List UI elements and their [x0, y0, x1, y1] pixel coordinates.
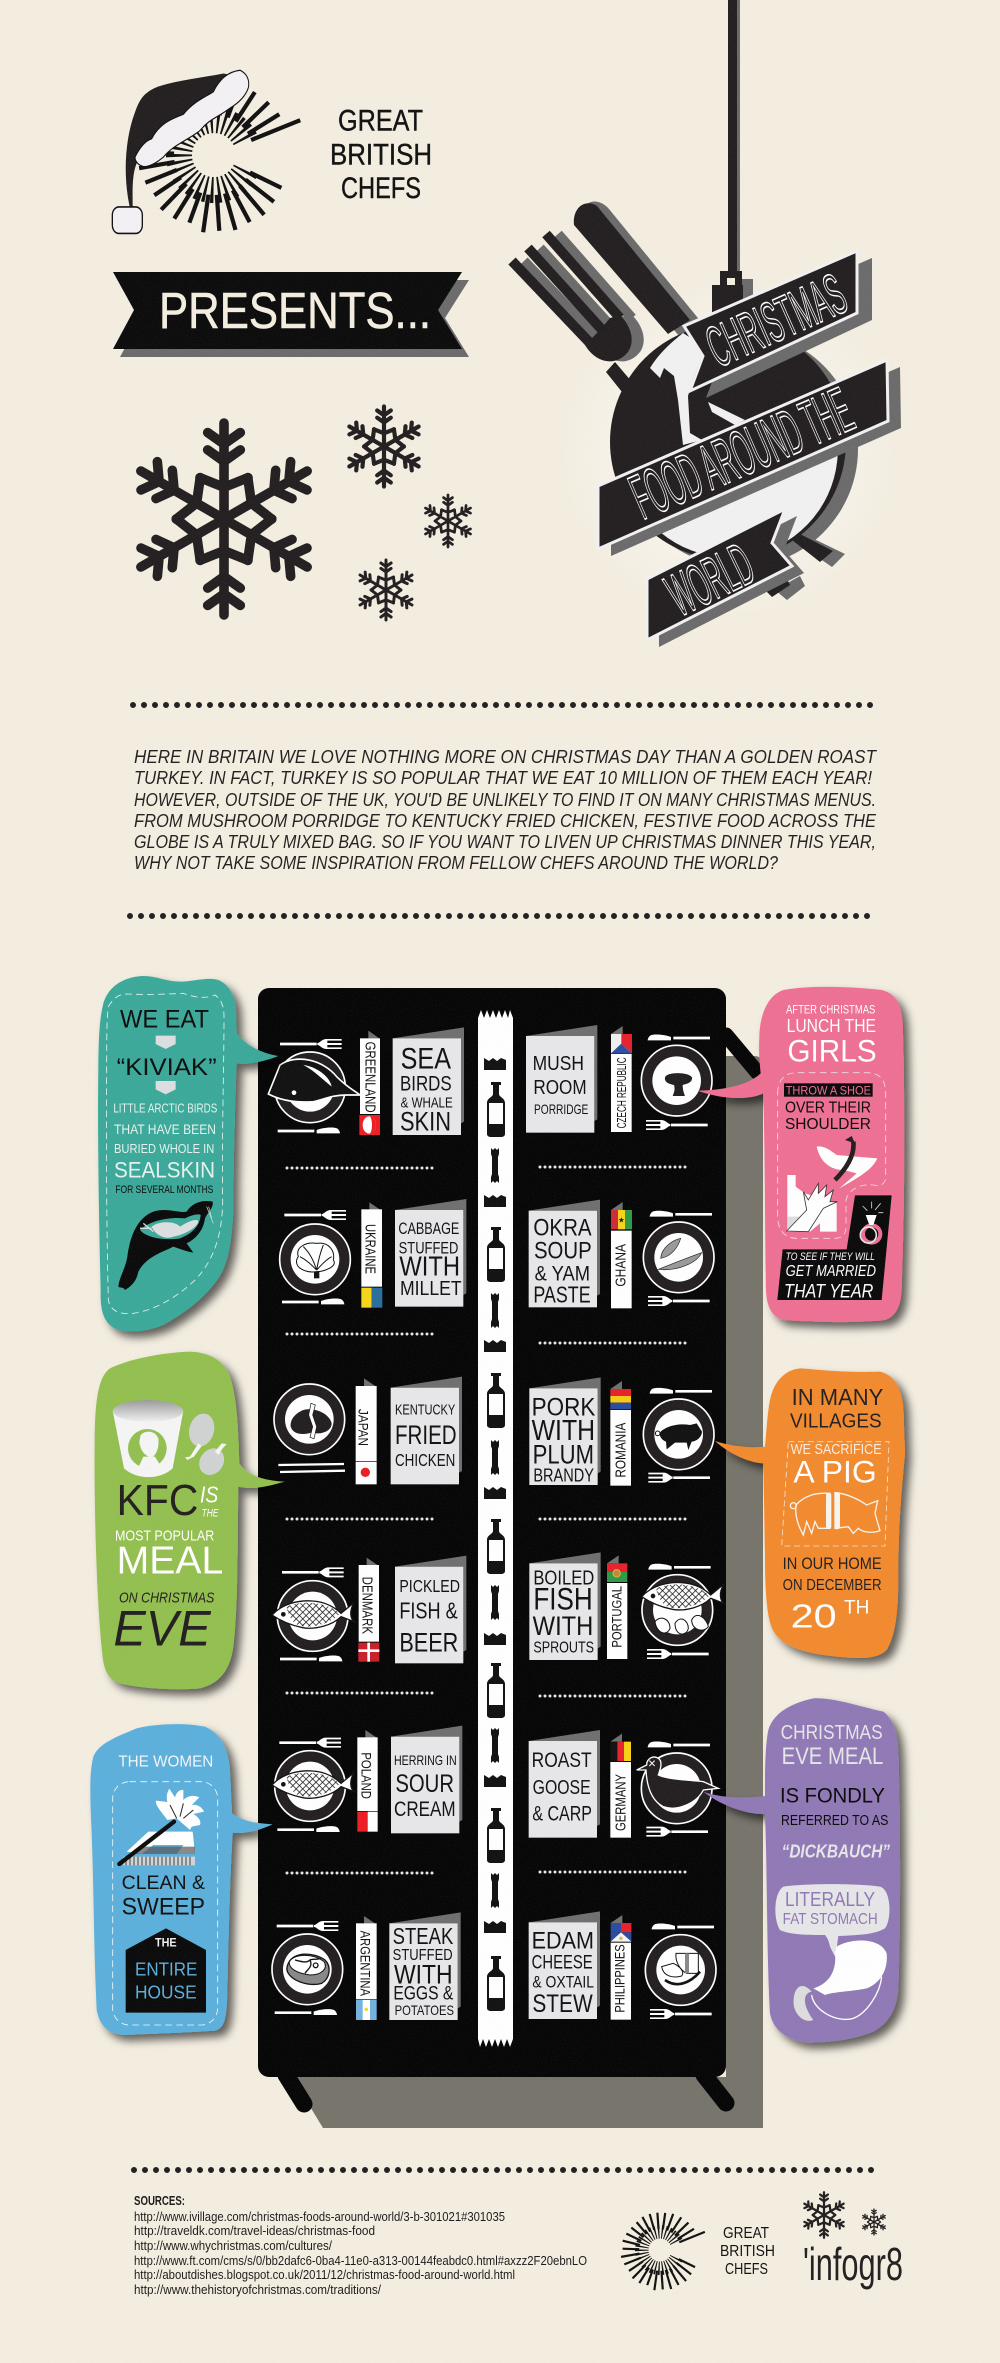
callout: kiviak (teal): BURIED WHOLE IN [114, 1141, 214, 1156]
callout: kiviak (teal): “KIVIAK” [117, 1054, 217, 1081]
icon: brush and duster [119, 1789, 204, 1865]
sources: SOURCES: [134, 2194, 185, 2208]
row: Poland: HERRING IN [394, 1753, 457, 1768]
sources: http://aboutdishes.blogspot.co.uk/2011/12/christmas-food-around-world.html [134, 2268, 515, 2282]
row: Greenland [268, 1027, 464, 1137]
table [258, 988, 757, 2104]
snowflakes [129, 406, 474, 620]
callout: the women (blue): SWEEP [122, 1893, 205, 1920]
callout: kfc (green): IS [200, 1481, 219, 1507]
row: Ghana: OKRA [533, 1214, 592, 1241]
intro text: TURKEY. IN FACT, TURKEY IS SO POPULAR THAT WE EAT 10 MILLION OF THEM EACH YEAR! [134, 768, 872, 788]
row: Greenland: SEA [401, 1042, 451, 1075]
row: Ghana: & YAM [535, 1261, 590, 1286]
callout: the women (blue) [90, 1724, 273, 2035]
callout: throw a shoe (pink): LUNCH THE [787, 1015, 876, 1036]
icon: seal [118, 1201, 213, 1290]
intro text: FROM MUSHROOM PORRIDGE TO KENTUCKY FRIED CHICKEN, FESTIVE FOOD ACROSS THE [134, 811, 877, 831]
icon: house [126, 1928, 206, 2013]
sources: http://www.ivillage.com/christmas-foods-around-world/3-b-301021#301035 [134, 2210, 505, 2224]
callout: dickbauch (purple): “DICKBAUCH” [782, 1841, 891, 1862]
callout: throw a shoe (pink): OVER THEIR [785, 1099, 871, 1116]
row: Germany: GOOSE [533, 1777, 591, 1799]
icon: split pig [790, 1493, 880, 1535]
row: Philippines [529, 1911, 716, 2020]
row: Argentina: WITH [394, 1959, 453, 1989]
sources: http://www.whychristmas.com/cultures/ [134, 2239, 332, 2253]
row: Denmark: DENMARK [359, 1577, 375, 1634]
row: Ukraine: STUFFED [399, 1238, 458, 1257]
intro text [134, 747, 878, 873]
row: Ukraine [280, 1199, 466, 1308]
callout: sacrifice a pig (orange): A PIG [793, 1453, 877, 1489]
row: Japan: KENTUCKY [395, 1403, 455, 1419]
intro text: GLOBE IS A TRULY MIXED BAG. SO IF YOU WANT TO LIVEN UP CHRISTMAS DINNER THIS YEAR, [134, 832, 876, 852]
row: Ghana [529, 1200, 714, 1308]
logo text: Great British Chefs: GREAT [338, 105, 423, 138]
panel: marriage ring: TO SEE IF THEY WILL [786, 1251, 875, 1263]
row: Ghana: ★ [618, 1215, 625, 1224]
callout: kfc (green): KFC [117, 1476, 198, 1525]
row: Argentina: STEAK [393, 1923, 453, 1949]
callout: sacrifice a pig (orange): IN MANY [792, 1384, 884, 1410]
callout: kfc (green): ON CHRISTMAS [119, 1591, 215, 1607]
table shadow [292, 1056, 763, 2128]
title ornament: christmas food around the world [512, 0, 901, 647]
row: Romania: PLUM [533, 1439, 594, 1469]
banner: presents [113, 272, 469, 357]
row: Romania [529, 1377, 714, 1486]
callout: kiviak (teal) [98, 976, 278, 1331]
callout: throw a shoe (pink): THROW A SHOE [786, 1083, 871, 1097]
row: Czech Republic [526, 1025, 712, 1133]
row: Germany: GERMANY [614, 1774, 630, 1831]
row: Germany [529, 1730, 718, 1838]
callout: kiviak (teal): FOR SEVERAL MONTHS [115, 1184, 213, 1196]
sources: http://traveldk.com/travel-ideas/christmas-food [134, 2224, 375, 2238]
callout: sacrifice a pig (orange): IN OUR HOME [783, 1555, 882, 1573]
ribbon: world: WORLD [656, 530, 764, 629]
row: Ukraine: CABBAGE [398, 1219, 459, 1238]
panel: marriage ring: GET MARRIED [786, 1263, 876, 1280]
row: Argentina: EGGS & [393, 1983, 453, 2004]
row: Argentina: STUFFED [393, 1947, 453, 1964]
icon: speech blob and stomach: FAT STOMACH [783, 1911, 878, 1928]
row: Poland: SOUR [395, 1770, 454, 1798]
row: Greenland: SKIN [400, 1107, 451, 1137]
row: Czech Republic: CZECH REPUBLIC [615, 1057, 629, 1128]
icon: house: THE [155, 1936, 177, 1950]
footer logo: Great British Chefs: CHEFS [725, 2261, 768, 2278]
row: Portugal: SPROUTS [533, 1640, 594, 1657]
table runner with bottles, crowns and crackers [478, 1010, 513, 2047]
row: Germany: ROAST [532, 1748, 592, 1772]
callout: kiviak (teal): SEALSKIN [114, 1158, 215, 1183]
footer logo: infogr8: 'infogr8 [803, 2238, 903, 2290]
ribbon: christmas [684, 251, 872, 398]
callout: sacrifice a pig (orange): WE SACRIFICE [791, 1442, 882, 1458]
row: Argentina [272, 1912, 461, 2020]
row: Greenland: GREENLAND [361, 1042, 377, 1113]
row: Czech Republic: PORRIDGE [534, 1102, 588, 1117]
row: Philippines: STEW [532, 1990, 593, 2018]
row: Japan: CHICKEN [395, 1450, 455, 1470]
callout: dickbauch (purple) [703, 1698, 900, 2043]
sources: http://www.thehistoryofchristmas.com/traditions/ [134, 2283, 381, 2297]
row: Romania: PORK [532, 1394, 595, 1422]
intro text: WHY NOT TAKE SOME INSPIRATION FROM FELLOW CHEFS AROUND THE WORLD? [134, 853, 778, 873]
row: Philippines: EDAM [532, 1927, 594, 1954]
callout: the women (blue): THE WOMEN [118, 1754, 213, 1771]
icon: speech blob and stomach: LITERALLY [785, 1889, 875, 1911]
logo text: Great British Chefs [330, 105, 432, 205]
footer logo: Great British Chefs [621, 2213, 775, 2290]
row: Portugal: BOILED [533, 1567, 594, 1589]
callout: sacrifice a pig (orange): 20 [791, 1597, 837, 1634]
row: Denmark: PICKLED [399, 1576, 460, 1596]
logo text: Great British Chefs: CHEFS [341, 172, 421, 205]
row: Poland: CREAM [394, 1797, 456, 1821]
intro text: HERE IN BRITAIN WE LOVE NOTHING MORE ON CHRISTMAS DAY THAN A GOLDEN ROAST [134, 747, 878, 767]
intro text: HOWEVER, OUTSIDE OF THE UK, YOU'D BE UNLIKELY TO FIND IT ON MANY CHRISTMAS MENUS. [134, 790, 876, 810]
row: Romania: WITH [532, 1415, 595, 1447]
icon: shoe and hand [787, 1136, 877, 1232]
row: Ukraine: WITH [399, 1251, 460, 1282]
callout: kiviak (teal): WE EAT [120, 1005, 209, 1033]
callout: throw a shoe (pink): SHOULDER [785, 1116, 871, 1133]
panel: marriage ring: THAT YEAR [784, 1281, 873, 1302]
callout: throw a shoe (pink): AFTER CHRISTMAS [786, 1003, 876, 1016]
row: Poland [272, 1726, 462, 1833]
row: Ghana: SOUP [534, 1237, 592, 1264]
callout: dickbauch (purple): IS FONDLY [780, 1784, 885, 1808]
row: Argentina: ARGENTINA [358, 1931, 374, 1997]
row: Czech Republic: ROOM [533, 1077, 587, 1099]
callout: kfc (green): THE [202, 1508, 219, 1520]
callout: kiviak (teal): THAT HAVE BEEN [114, 1121, 216, 1137]
callout: dickbauch (purple): EVE MEAL [782, 1743, 883, 1770]
row: Portugal: WITH [533, 1611, 593, 1641]
row: Greenland: & WHALE [401, 1094, 453, 1111]
sources: http://www.ft.com/cms/s/0/bb2dafc6-0ba4-11e0-a313-00144feabdc0.html#axzz2F20ebnLO [134, 2254, 587, 2268]
row: Japan: FRIED [395, 1420, 457, 1450]
row: Ukraine: UKRAINE [361, 1224, 377, 1274]
row: Denmark: FISH & [399, 1598, 458, 1624]
row: Philippines: PHILIPPINES [611, 1944, 627, 2013]
footer logo: Great British Chefs: BRITISH [720, 2243, 775, 2260]
callout: kfc (green): MEAL [117, 1539, 223, 1582]
callout: throw a shoe (pink) [697, 987, 904, 1322]
sources [134, 2194, 587, 2297]
icon: house: ENTIRE [135, 1959, 197, 1980]
row: Japan: JAPAN [355, 1409, 371, 1446]
footer logo: Great British Chefs: GREAT [723, 2225, 769, 2242]
row: Denmark [272, 1556, 466, 1663]
row: Denmark: BEER [399, 1628, 458, 1658]
row: Ghana: GHANA [614, 1244, 630, 1287]
row: Portugal: PORTUGAL [609, 1586, 625, 1648]
callout: kfc (green): MOST POPULAR [115, 1529, 214, 1545]
footer logo: infogr8 [802, 2192, 903, 2290]
row: Portugal [529, 1552, 726, 1660]
row: Philippines: & OXTAIL [532, 1973, 594, 1992]
logo: santa hat burst [112, 70, 300, 233]
row: Czech Republic: MUSH [533, 1053, 584, 1075]
row: Greenland: BIRDS [400, 1072, 452, 1096]
panel: marriage ring [777, 1195, 892, 1302]
row: Poland: POLAND [359, 1752, 375, 1799]
row: Ghana: PASTE [533, 1282, 591, 1308]
banner: presents: PRESENTS... [159, 282, 431, 339]
row: Ukraine: MILLET [400, 1277, 462, 1300]
logo text: Great British Chefs: BRITISH [330, 138, 432, 172]
callout: kiviak (teal): LITTLE ARCTIC BIRDS [113, 1102, 217, 1116]
callout: sacrifice a pig (orange): VILLAGES [790, 1411, 882, 1433]
callout: the women (blue): CLEAN & [122, 1873, 205, 1894]
row: Romania: BRANDY [533, 1464, 594, 1485]
callout: dickbauch (purple): CHRISTMAS [781, 1722, 883, 1744]
row: Romania: ROMANIA [614, 1422, 630, 1478]
callout: sacrifice a pig (orange) [715, 1368, 905, 1658]
row: Germany: & CARP [532, 1802, 592, 1826]
icon: kfc bucket [113, 1400, 229, 1480]
ribbon: world [647, 509, 804, 647]
callout: dickbauch (purple): REFERRED TO AS [781, 1813, 889, 1829]
callout: kfc (green): EVE [113, 1601, 211, 1657]
row: Philippines: CHEESE [532, 1953, 593, 1974]
callout: kfc (green) [95, 1352, 285, 1689]
icon: speech blob and stomach [775, 1884, 890, 2021]
callout: sacrifice a pig (orange): TH [844, 1597, 869, 1618]
icon: house: HOUSE [135, 1982, 197, 2003]
callout: sacrifice a pig (orange): ON DECEMBER [783, 1577, 882, 1594]
callout: throw a shoe (pink): GIRLS [787, 1033, 877, 1069]
row: Portugal: FISH [533, 1581, 593, 1616]
row: Argentina: POTATOES [395, 2003, 454, 2018]
row: Japan [274, 1377, 462, 1484]
ribbon: food around the [598, 360, 901, 556]
